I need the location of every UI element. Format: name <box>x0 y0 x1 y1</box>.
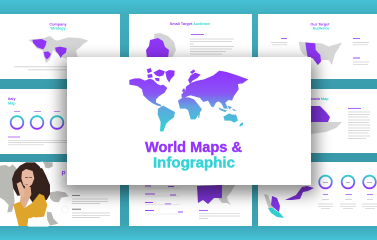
text block <box>199 210 240 218</box>
heading: italy map: Italy <box>8 97 16 101</box>
panel: profile with photo <box>0 162 120 227</box>
map: usa south <box>197 185 235 205</box>
title: Infographic <box>153 156 235 172</box>
map: canada <box>311 106 342 134</box>
caption lines <box>14 67 100 70</box>
heading: canada map: nada Map <box>311 97 329 101</box>
title: World Maps & <box>145 140 243 156</box>
map: world <box>129 68 248 131</box>
title <box>145 140 243 172</box>
panel: company strategy <box>0 14 120 79</box>
heading: our target audience: Our Target <box>310 22 330 26</box>
heading: small target audience: Small Target Audience <box>170 22 210 26</box>
text block <box>190 35 234 54</box>
table rules <box>145 188 180 214</box>
map: southeast asia <box>264 186 314 218</box>
panel: italy map <box>0 89 70 154</box>
text block <box>348 108 370 138</box>
heading: company strategy <box>49 22 68 31</box>
table rows <box>145 186 183 212</box>
heading: italy map: Map <box>8 101 16 105</box>
panel: main title card <box>67 57 311 185</box>
heading: company strategy: Company <box>49 22 68 26</box>
list item icons <box>62 180 68 213</box>
heading: our target audience: Audience <box>312 27 330 31</box>
map: small target region <box>146 33 176 58</box>
labels and text <box>271 38 369 64</box>
ring charts <box>11 116 63 129</box>
ring labels and text <box>318 195 377 209</box>
panel: our target audience <box>258 14 377 79</box>
ring values <box>323 181 372 183</box>
main card shadow <box>62 60 316 194</box>
panel: canada map <box>311 89 377 153</box>
panel: small target audience <box>129 14 252 79</box>
list item text <box>72 196 110 218</box>
heading: profile: P <box>62 172 66 178</box>
photo: woman with paint splash <box>0 162 69 227</box>
map: company strategy <box>28 36 88 63</box>
heading: italy map <box>8 97 16 105</box>
text block <box>8 137 67 145</box>
heading: company strategy: Strategy <box>50 27 66 31</box>
panel: rings and asia map <box>258 162 377 226</box>
map: usa <box>299 42 342 65</box>
heading: our target audience <box>310 22 330 31</box>
ring charts <box>319 176 376 188</box>
ring labels <box>14 110 60 112</box>
panel: table and usa map <box>129 162 252 226</box>
